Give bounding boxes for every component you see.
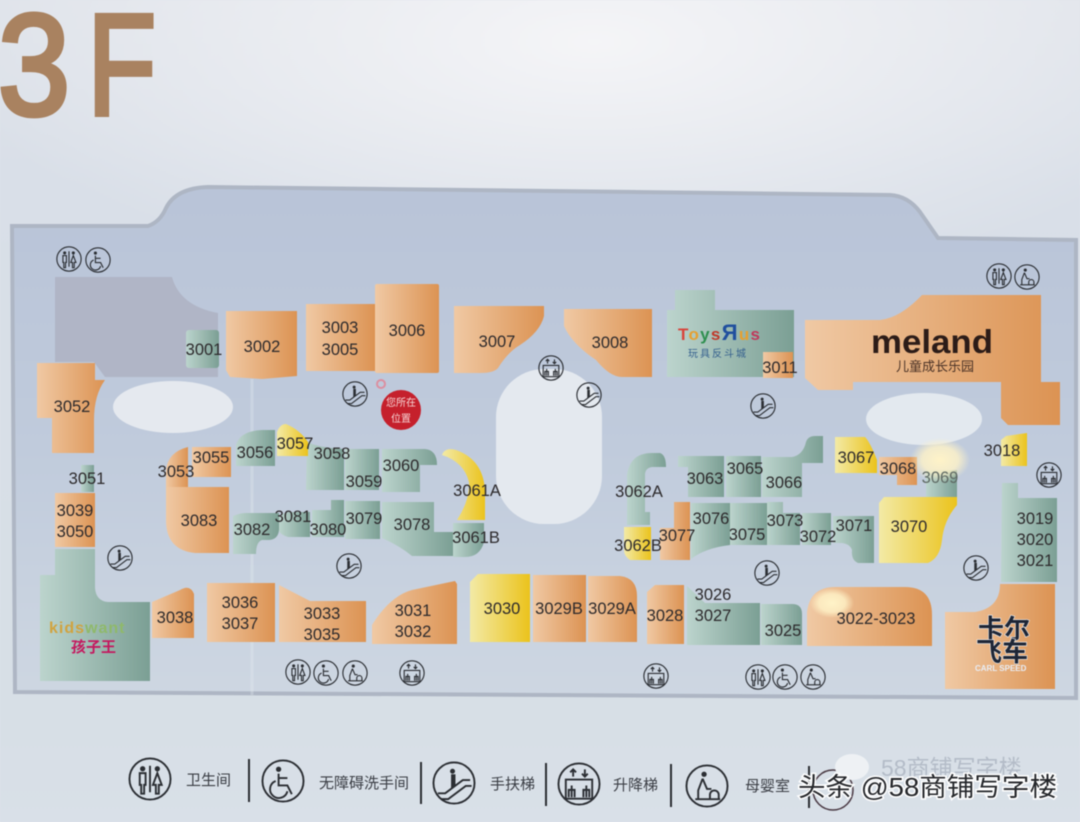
watermark: toutiao handle: 头条 @58商铺写字楼 [798,772,1057,802]
shop 3082: 3082 [234,521,270,539]
floor plan base [12,187,1076,698]
legend: lift: 升降梯 [613,777,658,794]
shop: Kidswant: 孩子王 [71,638,116,656]
shop: meland: meland [871,323,993,360]
legend: nursing room [686,765,790,807]
title: 3F [0,0,156,146]
shop 3071: 3071 [836,517,872,535]
shop 3078: 3078 [394,516,430,534]
shop 3065: 3065 [727,460,763,478]
you-are-here marker: 您所在 [386,396,416,409]
legend: toilet: 卫生间 [186,772,231,789]
shop 3061B: 3061B [452,529,500,547]
shop 3003/3005 [306,304,375,371]
shop: Toys R Us [667,290,794,377]
shop: Kidswant: kidswant [49,620,125,637]
shop 3008: 3008 [592,334,628,352]
shop 3033/3035 [279,585,366,644]
shop 3039/3050: 3050 [57,523,93,541]
shop: Carl Speed [945,584,1055,689]
shop 3056 [236,430,275,466]
shop 3061A [442,449,501,520]
shop 3001 [186,330,222,368]
shop 3079 [345,501,382,539]
shop 3026/3027: 3026 [695,586,731,604]
shop 3036/3037 [207,583,275,642]
shop 3011: 3011 [762,359,798,377]
atrium: central void [496,369,602,524]
legend: toilet [129,758,231,800]
shop 3063: 3063 [687,470,723,488]
shop 3072: 3072 [800,528,836,546]
shop 3008 [564,309,652,377]
legend: accessible washroom [262,760,409,802]
icon group: bottom-right facilities [746,665,825,689]
shop 3080 [310,500,346,539]
shop 3083 [166,487,229,553]
shop 3070: 3070 [891,518,927,536]
shop 3030 [470,574,530,642]
icon group: top-left toilets [57,247,110,272]
shop 3060 [382,449,437,492]
shop 3058: 3058 [314,445,350,463]
shop 3029B [533,575,586,642]
shop 3038: 3038 [157,609,193,627]
shop 3065 [726,456,763,497]
legend: escalator: 手扶梯 [490,776,535,793]
atrium: right oval void [866,393,982,445]
shop 3018: 3018 [984,442,1020,460]
shop 3022-3023 [807,587,932,646]
shop 3071 [833,516,874,563]
shop 3069: 3069 [922,469,958,487]
shop 3059 [345,449,382,491]
shop 3066: 3066 [766,474,802,492]
shop 3036/3037: 3037 [222,615,258,633]
shop 3007 [454,306,544,373]
shop 3026/3027 [687,586,760,645]
shop 3029A [588,576,637,642]
shop 3019/3020/3021: 3021 [1017,552,1053,570]
shop 3067: 3067 [838,449,874,467]
you-are-here marker [377,380,421,430]
shop 3062A [615,453,666,525]
shop 3001: 3001 [186,341,222,359]
legend: lift [558,763,658,805]
shop 3026/3027: 3027 [695,607,731,625]
shop 3029B: 3029B [535,600,583,618]
shop 3062B [614,527,662,560]
shop 3066 [762,436,823,497]
icon: escalators [108,382,988,585]
watermark: faint account name: 58商铺写字楼 [881,755,1022,781]
shop 3031/3032 [372,581,457,644]
shop 3060: 3060 [383,457,419,475]
shop 3082 [233,513,279,554]
legend: nursing room: 母婴室 [745,778,790,795]
shop 3019/3020/3021: 3019 [1017,510,1053,528]
shop 3029A: 3029A [588,600,636,618]
shop 3068 [879,457,917,485]
shop 3039/3050 [55,493,95,547]
shop 3028: 3028 [647,607,683,625]
shop 3061A: 3061A [453,482,501,500]
shop 3075 [729,503,767,545]
shop 3076 [691,503,730,559]
shop 3051 [69,465,105,492]
service block (grey) [55,277,218,377]
shop 3053 [158,447,194,487]
shop 3067 [835,437,877,473]
shop 3002 [226,311,297,379]
shop 3033/3035: 3033 [304,605,340,623]
shop 3076: 3076 [693,510,729,528]
shop 3051: 3051 [69,470,105,488]
shop 3070 [879,497,957,563]
legend: escalator [433,762,535,804]
shop 3078 [382,502,453,556]
shop 3053: 3053 [158,463,194,481]
shop 3007: 3007 [479,333,515,351]
shop 3006 [375,284,439,373]
shop 3018 [984,433,1027,466]
shop: Kidswant [40,549,150,681]
shop 3022-3023: 3022-3023 [837,610,915,628]
shop 3062A: 3062A [615,483,663,501]
shop 3077: 3077 [659,527,695,545]
shop 3019/3020/3021 [1001,483,1057,582]
shop 3031/3032: 3032 [395,623,431,641]
shop 3002: 3002 [244,338,280,356]
shop 3003/3005: 3003 [322,319,358,337]
shop 3025: 3025 [765,622,801,640]
shop 3081: 3081 [275,508,311,526]
shop 3003/3005: 3005 [322,341,358,359]
shop: meland [805,295,1060,425]
shop 3011 [762,352,798,378]
shop 3073 [767,502,803,545]
shop 3068: 3068 [880,460,916,478]
shop 3075: 3075 [729,526,765,544]
shop 3057: 3057 [277,435,313,453]
shop 3072 [800,513,836,546]
shop 3055 [192,447,231,477]
shop 3038 [152,588,194,638]
shop 3080: 3080 [310,521,346,539]
shop 3031/3032: 3031 [395,602,431,620]
shop: Toys R Us: 玩具反斗城 [688,348,748,360]
shop 3069 [910,438,970,497]
shop 3039/3050: 3039 [57,502,93,520]
icon: lifts [400,356,1061,688]
shop 3052 [37,363,105,453]
shop 3055: 3055 [193,449,229,467]
shop 3030: 3030 [484,600,520,618]
shop 3057 [277,424,313,456]
shop 3028 [647,585,684,644]
shop 3083: 3083 [181,512,217,530]
shop 3073: 3073 [767,512,803,530]
shop 3062B: 3062B [614,537,662,555]
shop: meland: 儿童成长乐园 [896,359,974,374]
shop: Carl Speed: CARL SPEED [975,664,1027,673]
shop 3061B [452,523,500,557]
shop 3077 [659,502,695,560]
shop 3081 [275,508,311,537]
shop: Carl Speed: 飞车 [976,637,1028,667]
you-are-here marker: 位置 [391,412,411,425]
shop 3006: 3006 [389,322,425,340]
shop 3019/3020/3021: 3020 [1017,531,1053,549]
shop 3079: 3079 [346,510,382,528]
legend [129,758,809,808]
shop: Carl Speed: 卡尔 [978,614,1030,644]
atrium: left oval void [113,381,233,433]
shop 3033/3035: 3035 [304,626,340,644]
shop 3036/3037: 3036 [222,594,258,612]
legend: partly hidden extra icon [813,770,853,810]
shop 3058 [306,442,350,490]
icon group: top-right facilities [987,264,1039,289]
shop 3063 [678,456,724,497]
icon group: bottom-left facilities [286,660,367,685]
shop 3056: 3056 [237,444,273,462]
shop 3052: 3052 [54,398,90,416]
shop 3025 [761,604,802,645]
shop 3059: 3059 [346,473,382,491]
shop: Toys R Us: ToysЯus [678,320,760,345]
legend: accessible washroom: 无障碍洗手间 [319,774,409,792]
